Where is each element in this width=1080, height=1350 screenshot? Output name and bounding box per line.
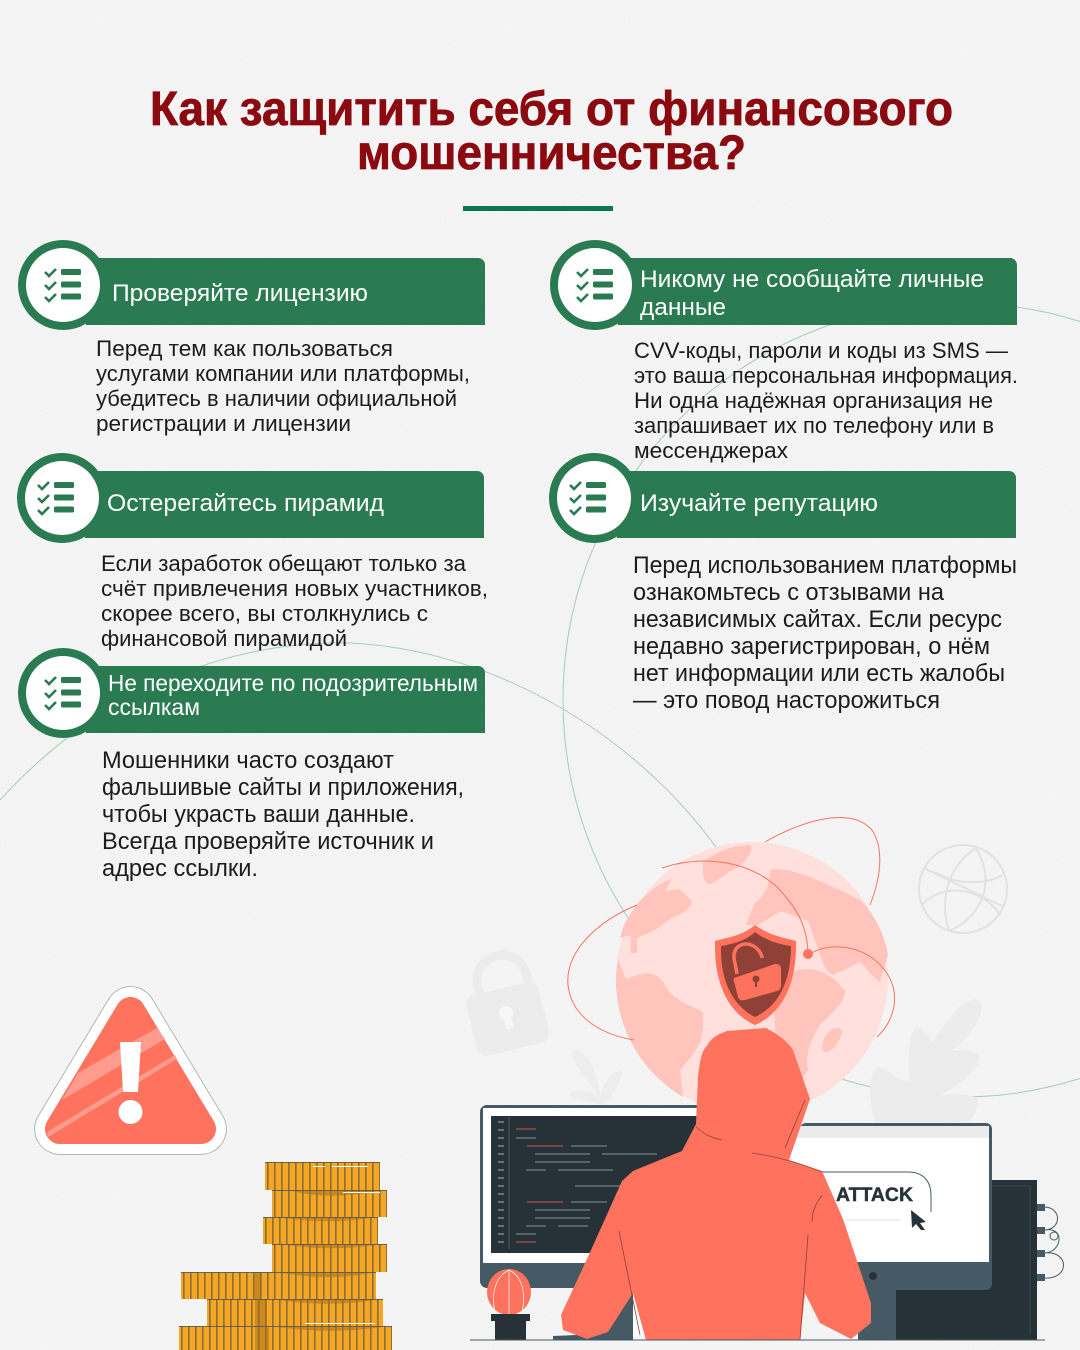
text: license: убедитесь в наличии официальной xyxy=(96,386,457,411)
heading bar: license xyxy=(86,258,485,325)
text: license: Перед тем как пользоваться xyxy=(96,336,393,361)
heading: personal data: данные xyxy=(640,294,726,321)
text: personal data: Ни одна надёжная организация не xyxy=(634,388,993,413)
coin stacks xyxy=(179,1162,392,1350)
text: personal data xyxy=(634,338,1018,463)
text: suspicious links: адрес ссылки. xyxy=(102,855,258,882)
icon: checklist suspicious links xyxy=(18,648,108,738)
left monitor stand xyxy=(553,1285,633,1340)
icon: checklist license xyxy=(18,240,108,330)
panel: license xyxy=(18,240,485,436)
title: Как защитить себя от финансового xyxy=(150,83,953,136)
text: suspicious links: Всегда проверяйте источник и xyxy=(102,828,434,855)
text: suspicious links xyxy=(102,747,464,882)
background plant large xyxy=(870,999,982,1122)
text: personal data: мессенджерах xyxy=(634,438,789,463)
title xyxy=(150,83,953,180)
text: reputation: независимых сайтах. Если ресурс xyxy=(633,606,1002,633)
attack button xyxy=(820,1172,931,1220)
left monitor xyxy=(480,1105,723,1288)
heading: suspicious links: ссылкам xyxy=(108,694,200,720)
icon: warning triangle xyxy=(47,1012,201,1137)
heading: personal data: Никому не сообщайте личные xyxy=(640,266,984,293)
title: мошенничества? xyxy=(357,127,746,180)
text: license: услугами компании или платформы, xyxy=(96,361,470,386)
heading: license: Проверяйте лицензию xyxy=(112,280,368,307)
icon: checklist pyramids xyxy=(17,453,107,543)
text: reputation: недавно зарегистрирован, о нём xyxy=(633,633,990,660)
icon: checklist reputation xyxy=(549,453,639,543)
heading: personal data xyxy=(640,266,984,321)
text: license: регистрации и лицензии xyxy=(96,411,351,436)
background plant small xyxy=(568,1050,622,1105)
text: reputation xyxy=(633,552,1017,714)
text: personal data: это ваша персональная информация. xyxy=(634,363,1018,388)
text: personal data: запрашивает их по телефону или в xyxy=(634,413,994,438)
text: pyramids xyxy=(101,551,488,651)
title underline xyxy=(463,206,613,211)
text: suspicious links: чтобы украсть ваши данные. xyxy=(102,801,415,828)
text: reputation: ознакомьтесь с отзывами на xyxy=(633,579,945,606)
text: reputation: нет информации или есть жалобы xyxy=(633,660,1005,687)
text: pyramids: скорее всего, вы столкнулись с xyxy=(101,601,428,626)
ground line xyxy=(470,1339,1045,1341)
icon: checklist personal data xyxy=(550,240,640,330)
code lines xyxy=(498,1122,657,1242)
heading bar: suspicious links xyxy=(86,666,485,733)
orbit lines xyxy=(568,818,895,1040)
text: pyramids: Если заработок обещают только за xyxy=(101,551,466,576)
text: suspicious links: Мошенники часто создают xyxy=(102,747,394,774)
right monitor xyxy=(790,1123,1064,1340)
text: personal data: CVV-коды, пароли и коды из SMS — xyxy=(634,338,1008,363)
panel: pyramids xyxy=(17,453,488,651)
computer tower xyxy=(896,1180,1064,1340)
heading bar: reputation xyxy=(617,471,1016,538)
heading: reputation: Изучайте репутацию xyxy=(640,490,878,517)
panel: suspicious links xyxy=(18,648,485,882)
shield with open lock xyxy=(715,925,796,1025)
heading: suspicious links: Не переходите по подозрительным xyxy=(108,670,478,696)
panel: personal data xyxy=(550,240,1018,463)
text: reputation: Перед использованием платформы xyxy=(633,552,1017,579)
text: reputation: — это повод насторожиться xyxy=(633,687,940,714)
heading bar: pyramids xyxy=(85,471,484,538)
background lock xyxy=(456,948,551,1058)
hooded person xyxy=(561,1028,871,1340)
attack button: ATTACK xyxy=(836,1185,913,1206)
text: pyramids: счёт привлечения новых участников, xyxy=(101,576,488,601)
text: pyramids: финансовой пирамидой xyxy=(101,626,347,651)
text: suspicious links: фальшивые сайты и приложения, xyxy=(102,774,464,801)
heading: pyramids: Остерегайтесь пирамид xyxy=(107,490,384,517)
text: license xyxy=(96,336,470,436)
background globe icon xyxy=(919,845,1007,933)
cactus in pot xyxy=(487,1269,531,1340)
icon: mouse cursor xyxy=(911,1210,926,1230)
panel: reputation xyxy=(549,453,1017,714)
heading bar: personal data xyxy=(618,258,1017,325)
globe xyxy=(616,842,888,1114)
heading: suspicious links xyxy=(108,670,478,720)
